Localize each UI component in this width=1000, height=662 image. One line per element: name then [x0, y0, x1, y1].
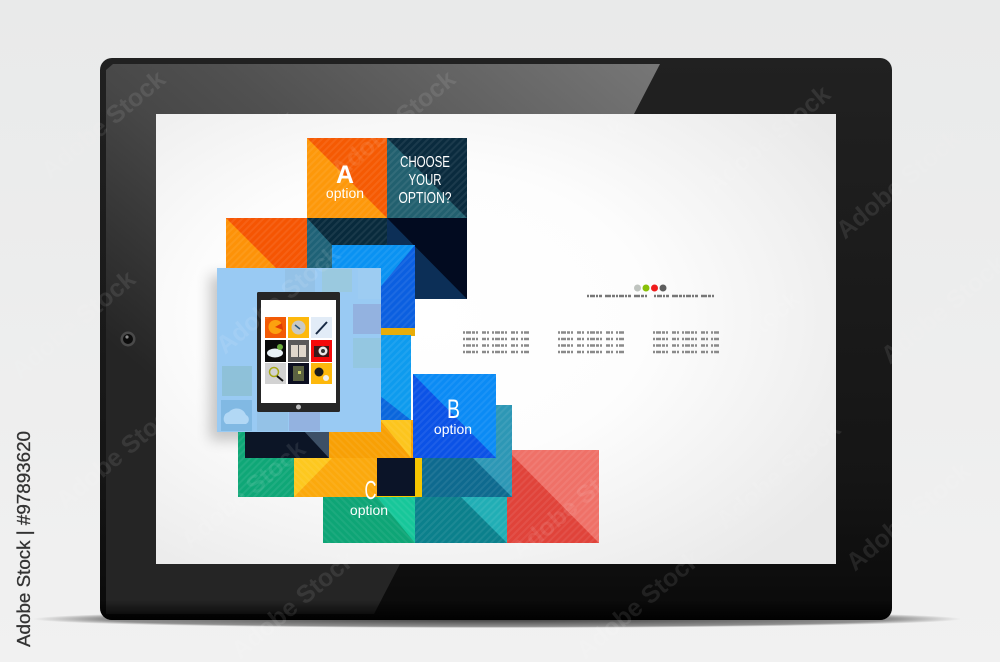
stock watermarks: Adobe Stock	[226, 545, 361, 662]
tile: yellow stripe	[360, 328, 415, 336]
letter A: A	[336, 161, 354, 189]
tile: left green	[238, 430, 298, 497]
icon: camera	[311, 340, 332, 362]
tablet ground shadow	[32, 610, 962, 628]
tile: navy lower left	[245, 430, 330, 458]
question text: YOUR	[408, 172, 442, 189]
icon: notebook	[288, 363, 309, 384]
mini tablet	[257, 292, 340, 412]
tile: option B	[413, 374, 496, 458]
tile: small navy with yellow edge	[377, 458, 422, 497]
tile group: option mosaic	[226, 138, 599, 543]
icon: clock	[288, 317, 309, 338]
tile: teal back	[420, 405, 512, 497]
stock watermarks: Adobe Stock	[671, 285, 806, 405]
icon grid	[265, 317, 332, 384]
tile: bright blue	[332, 245, 415, 330]
screen	[156, 114, 836, 564]
tile: choose your option	[387, 138, 467, 218]
question text: CHOOSE	[400, 154, 450, 171]
soft shadows beneath tiles	[210, 275, 385, 440]
stock watermarks: Adobe Stock	[571, 545, 706, 662]
stock watermarks: Adobe Stock	[176, 435, 311, 555]
light blue panel with mini tablet	[217, 268, 381, 432]
colour dots	[634, 284, 666, 292]
icon: pen	[311, 317, 332, 338]
tile: dark row two	[307, 218, 387, 299]
stock watermarks: Adobe Stock	[51, 395, 186, 515]
stock watermarks: Adobe Stock	[506, 445, 641, 565]
icon: gears	[311, 363, 332, 384]
letter B: B	[447, 394, 460, 424]
C option label: option	[350, 502, 388, 518]
tile: yellow	[294, 458, 422, 497]
stock watermarks: Adobe Stock	[496, 115, 631, 235]
tile: middle blue	[379, 335, 411, 420]
icon: chart	[265, 317, 286, 338]
icon: cloud	[265, 340, 286, 362]
stock watermarks: Adobe Stock	[711, 415, 846, 535]
tile: red	[507, 450, 599, 543]
stock watermarks: Adobe Stock	[831, 125, 966, 245]
tile: orange row two	[226, 218, 307, 299]
stock watermarks: Adobe Stock	[841, 457, 976, 577]
tile: bottom green	[323, 497, 415, 543]
camera	[120, 332, 136, 346]
icon: book	[288, 340, 309, 362]
stock watermarks: Adobe Stock	[36, 65, 171, 185]
A option label: option	[326, 185, 364, 201]
stock watermarks: Adobe Stock	[326, 65, 461, 185]
tile: option A	[307, 138, 387, 218]
stock id label: Adobe Stock | #97893620	[13, 431, 34, 647]
stock watermarks: Adobe Stock	[166, 105, 301, 225]
tile: navy row two	[387, 218, 467, 299]
screen glare	[106, 64, 660, 614]
question text: OPTION?	[398, 190, 452, 207]
greeked column one	[463, 332, 530, 352]
slide heading placeholder	[587, 284, 714, 296]
greeked column three	[653, 332, 720, 352]
icon: magnifier	[265, 363, 286, 384]
tile: lower orange	[329, 420, 414, 458]
tile: bottom teal	[415, 497, 507, 543]
question text	[398, 154, 452, 207]
stock watermarks: Adobe Stock	[211, 240, 346, 360]
stock watermarks: Adobe Stock	[701, 80, 836, 200]
greeked column two	[558, 332, 625, 352]
greeked subtitle	[587, 295, 714, 297]
ghost icons on panel	[221, 269, 381, 431]
stock watermarks: Adobe Stock	[6, 265, 141, 385]
tablet device	[100, 58, 892, 620]
letter C: C	[364, 475, 376, 505]
B option label: option	[434, 421, 472, 437]
